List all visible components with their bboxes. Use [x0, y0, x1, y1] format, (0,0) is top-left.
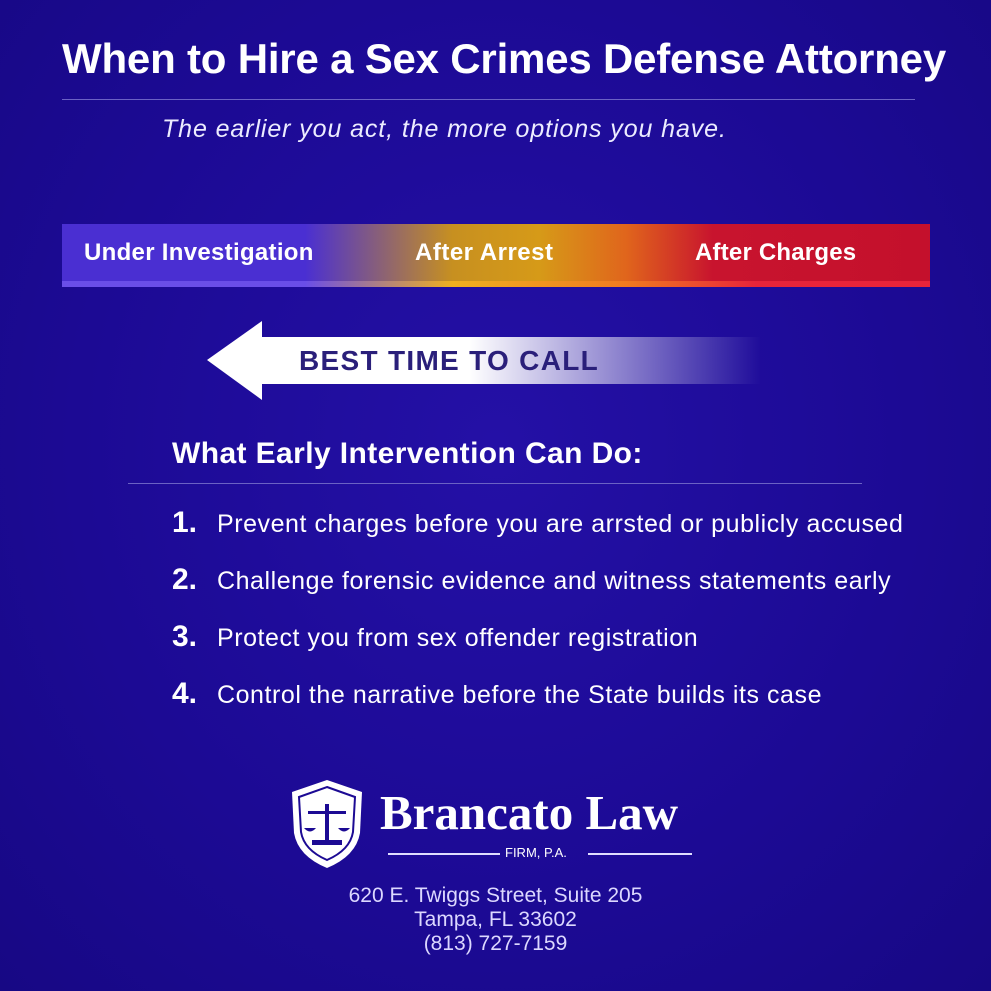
item 4: Control the narrative before the State builds its case [217, 681, 822, 709]
timeline bar [62, 224, 930, 287]
icon: shield with scales [292, 780, 362, 868]
address: 620 E. Twiggs Street, Suite 205 [349, 884, 642, 907]
address: (813) 727-7159 [424, 932, 567, 955]
item 1: Prevent charges before you are arrsted or publicly accused [217, 510, 903, 538]
address [349, 884, 642, 955]
item 2: 2. [172, 563, 197, 596]
item 2: Challenge forensic evidence and witness statements early [217, 567, 891, 595]
address: Tampa, FL 33602 [414, 908, 577, 931]
label: under investigation: Under Investigation [84, 239, 314, 266]
list [172, 506, 903, 710]
label: after charges: After Charges [695, 239, 856, 266]
firm name: Brancato Law [380, 785, 678, 840]
item 3: 3. [172, 620, 197, 653]
subtitle: The earlier you act, the more options you have. [162, 115, 727, 143]
label: after arrest: After Arrest [415, 239, 553, 266]
logo [292, 780, 692, 868]
item 1: 1. [172, 506, 197, 539]
item 3: Protect you from sex offender registration [217, 624, 698, 652]
title: When to Hire a Sex Crimes Defense Attorney [62, 35, 946, 82]
heading: early intervention: What Early Intervention Can Do: [172, 437, 643, 470]
item 4: 4. [172, 677, 197, 710]
logo: FIRM, P.A. [505, 845, 567, 860]
arrow: best time to call [207, 321, 750, 400]
arrow: best time to call: BEST TIME TO CALL [299, 345, 599, 376]
